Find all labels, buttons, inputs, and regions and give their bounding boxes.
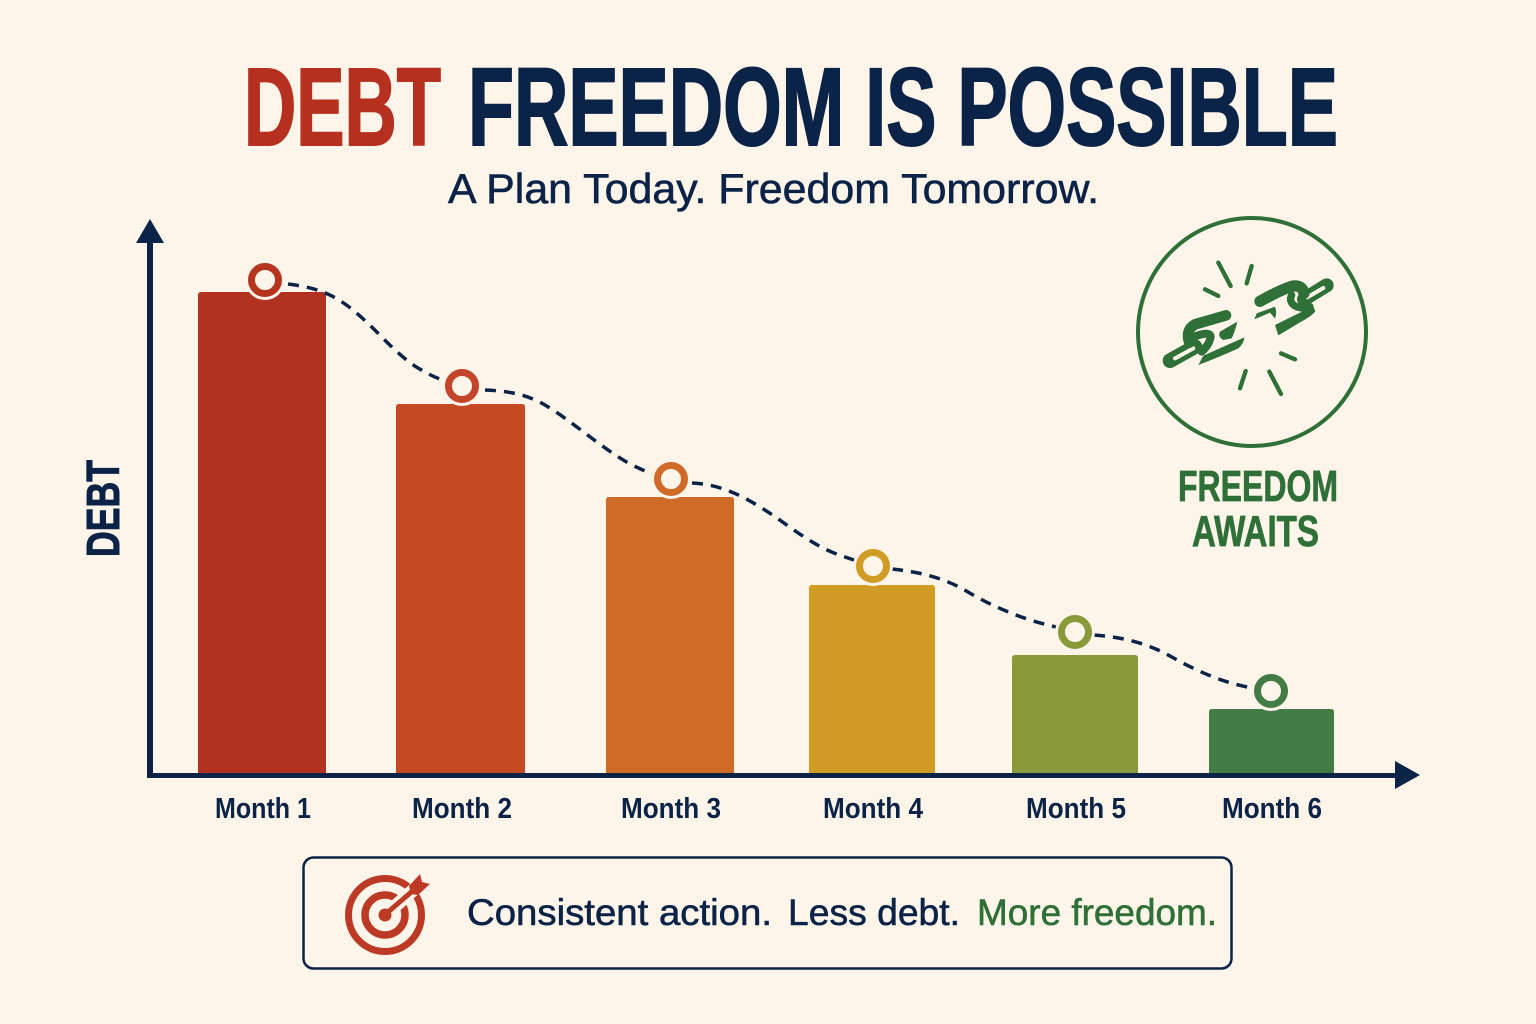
freedom awaits label: [1178, 462, 1338, 556]
chart bars: [198, 292, 1334, 774]
freedom awaits label: FREEDOM: [1178, 462, 1338, 511]
subtitle: A Plan Today. Freedom Tomorrow.: [448, 165, 1099, 212]
marker: month 6: [1251, 671, 1291, 711]
callout box: [304, 858, 1232, 968]
left chain pieces: [1170, 315, 1244, 365]
callout text: Less debt.: [788, 892, 960, 933]
marker: month 4: [853, 546, 893, 586]
month labels: [215, 793, 1322, 825]
x axis arrow: [147, 761, 1420, 789]
callout text: [467, 892, 1217, 933]
marker: month 5: [1055, 612, 1095, 652]
month labels: Month 2: [412, 793, 512, 825]
axes: [136, 219, 1420, 789]
bar: month 2: [396, 404, 525, 774]
bar: month 6: [1209, 709, 1334, 774]
callout text: More freedom.: [977, 892, 1217, 933]
dashed trend line: [288, 284, 1252, 688]
bar: month 4: [809, 585, 935, 774]
month labels: Month 5: [1026, 793, 1126, 825]
y axis label: DEBT: [77, 460, 129, 557]
month labels: Month 4: [823, 793, 923, 825]
title: [244, 46, 1338, 169]
right chain pieces: [1254, 285, 1327, 335]
bar: month 1: [198, 292, 326, 774]
month labels: Month 6: [1222, 793, 1322, 825]
freedom awaits label: AWAITS: [1192, 507, 1319, 556]
spark lines: [1205, 263, 1295, 394]
bar: month 3: [606, 497, 734, 774]
data markers: [245, 260, 1291, 711]
marker: month 2: [442, 366, 482, 406]
title: DEBT: [244, 46, 441, 169]
icon: broken chain in circle: [1138, 218, 1366, 446]
marker: month 3: [651, 459, 691, 499]
month labels: Month 3: [621, 793, 721, 825]
bar: month 5: [1012, 655, 1138, 774]
icon: target with arrow: [348, 874, 430, 952]
month labels: Month 1: [215, 793, 311, 825]
marker: month 1: [245, 260, 285, 300]
callout text: Consistent action.: [467, 892, 772, 933]
y axis arrow: [136, 219, 164, 777]
